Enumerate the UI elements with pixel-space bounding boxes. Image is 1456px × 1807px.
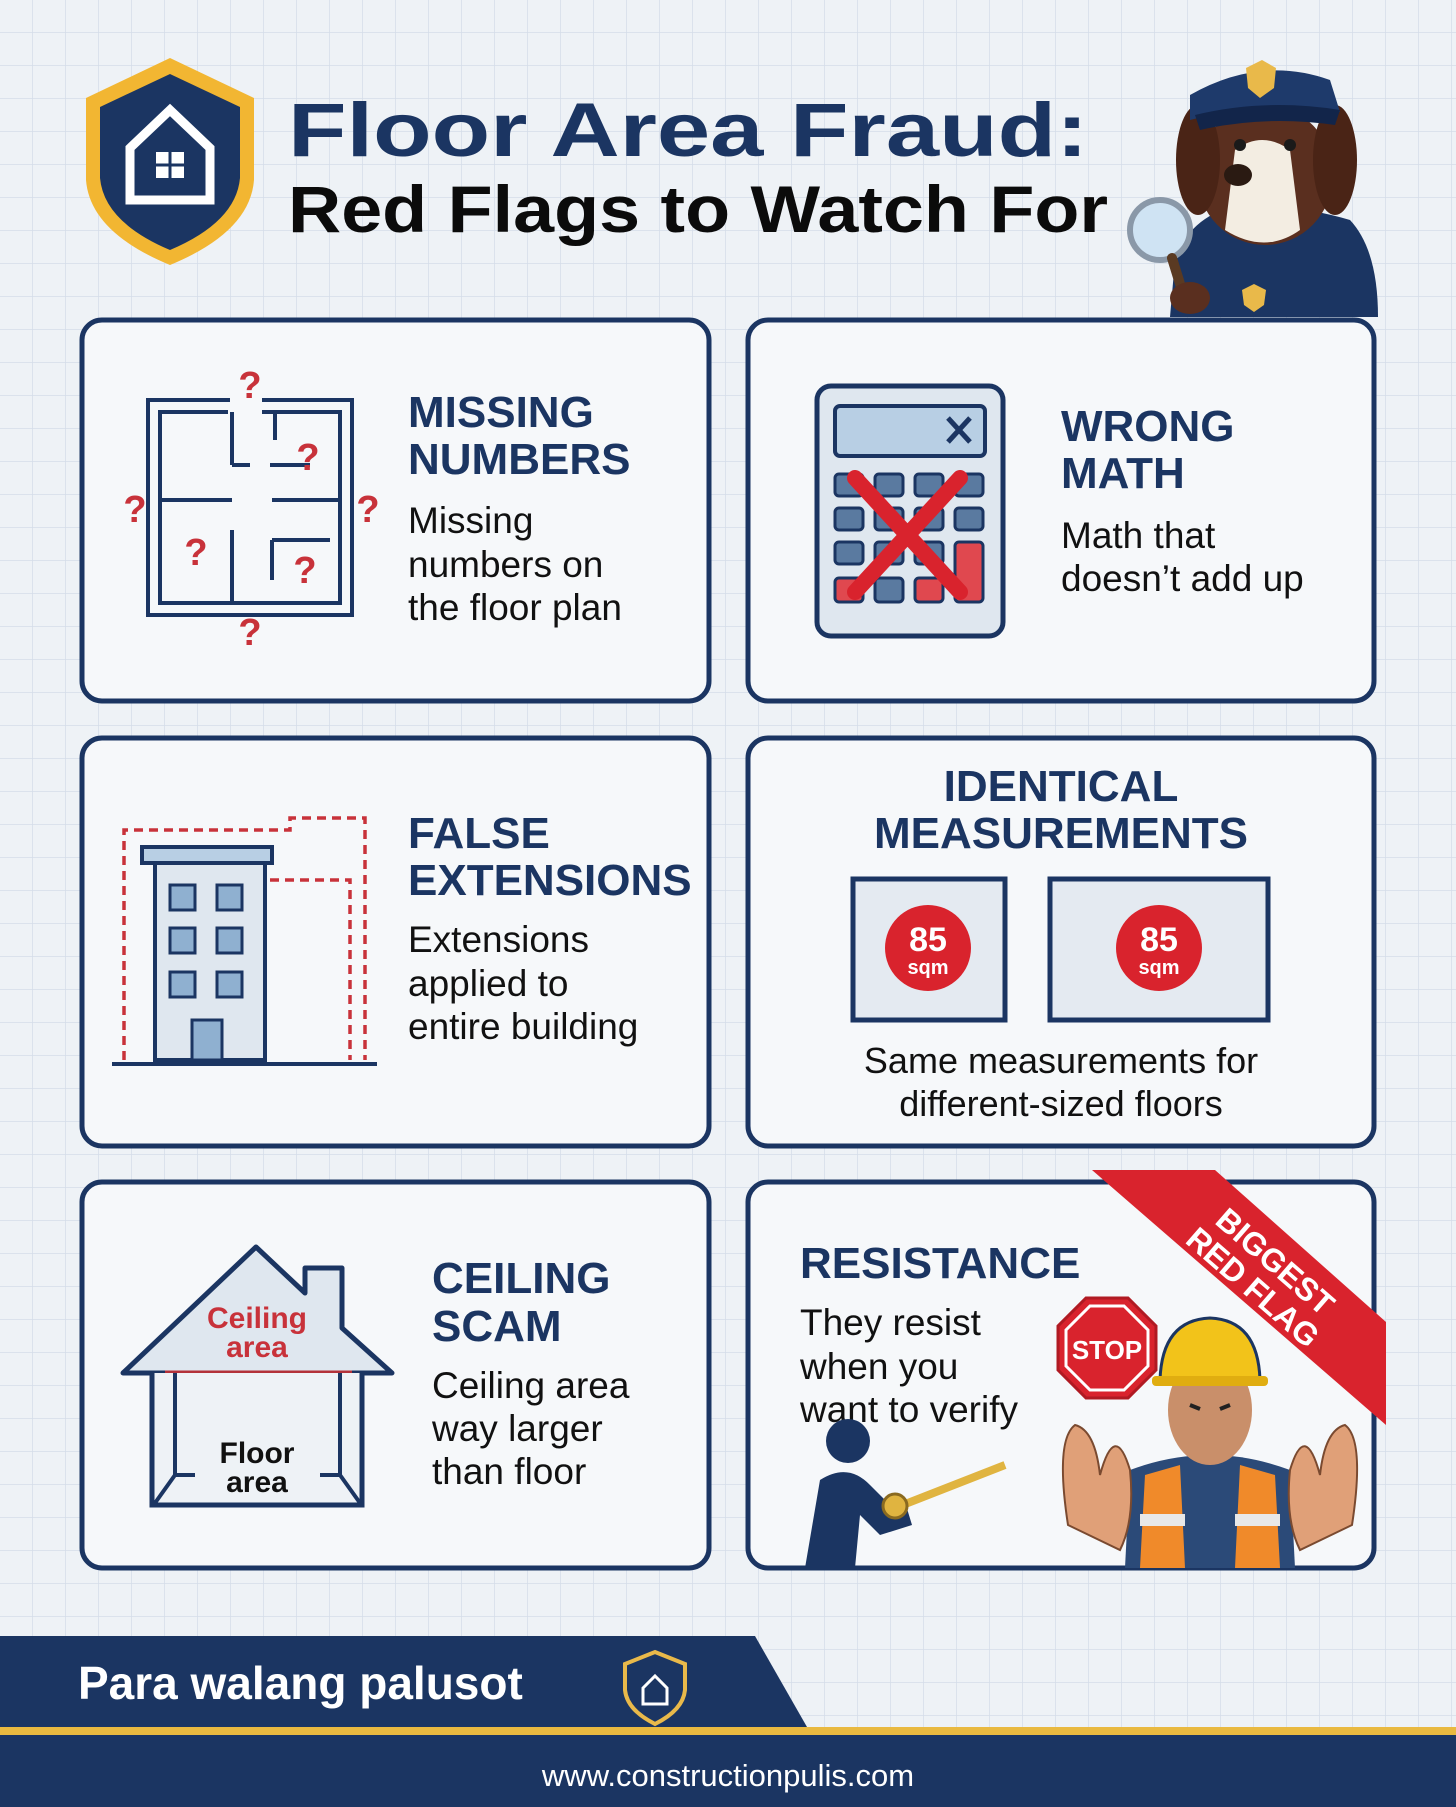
heading: RESISTANCE (800, 1239, 1080, 1288)
footer banner: tagline (0, 1636, 807, 1727)
icon: small shield (625, 1652, 685, 1724)
icon: two floor boxes with 85 sqm: sqm (907, 957, 949, 979)
text block: the floor plan (408, 587, 622, 628)
text block: applied to (408, 963, 568, 1004)
heading: MEASUREMENTS (874, 809, 1248, 858)
text block: doesn’t add up (1061, 558, 1304, 599)
text block: They resist (800, 1302, 981, 1343)
title: Floor Area Fraud: (288, 88, 1088, 173)
text block: way larger (431, 1408, 603, 1449)
footer: website url (0, 1735, 1456, 1807)
heading: EXTENSIONS (408, 856, 692, 905)
icon: floor plan with question marks: ? (238, 612, 262, 654)
text block: when you (799, 1346, 958, 1387)
text block: entire building (408, 1006, 638, 1047)
text block: different-sized floors (899, 1083, 1223, 1124)
text block: Same measurements for (864, 1040, 1258, 1081)
panel: wrong math (748, 320, 1374, 701)
heading: MISSING (408, 388, 594, 437)
footer banner: tagline: Para walang palusot (78, 1657, 523, 1709)
icon: building with dashed extensions (112, 818, 377, 1064)
icon: stop sign: STOP (1072, 1335, 1142, 1365)
icon: two floor boxes with 85 sqm (853, 879, 1268, 1020)
icon: stop sign (1058, 1298, 1156, 1398)
panel: ceiling scam (82, 1182, 709, 1568)
icon: floor plan with question marks: ? (296, 437, 320, 479)
title (288, 88, 1108, 246)
icon: floor plan with question marks: ? (293, 550, 317, 592)
icon: floor plan with question marks: ? (356, 489, 380, 531)
panel: identical measurements (748, 738, 1374, 1146)
panel: false extensions (82, 738, 709, 1146)
text block: numbers on (408, 544, 603, 585)
text block: Ceiling area (432, 1365, 629, 1406)
icon: house ceiling vs floor: Ceiling (207, 1302, 307, 1335)
icon: house ceiling vs floor: area (226, 1466, 288, 1499)
icon: house ceiling vs floor (123, 1247, 392, 1505)
heading: NUMBERS (408, 435, 630, 484)
logo shield (86, 58, 254, 265)
heading: SCAM (432, 1302, 562, 1351)
heading: MATH (1061, 449, 1185, 498)
footer: website url: www.constructionpulis.com (541, 1758, 914, 1793)
icon: floor plan with question marks: ? (238, 365, 262, 407)
ribbon: biggest red flag: BIGGEST (1209, 1201, 1341, 1323)
icon: person measuring (805, 1419, 1005, 1568)
icon: house ceiling vs floor: area (226, 1331, 288, 1364)
icon: floor plan with question marks: ? (184, 532, 208, 574)
text block: than floor (432, 1451, 586, 1492)
icon: calculator with red X (817, 386, 1003, 636)
ribbon: biggest red flag (1092, 1170, 1386, 1425)
icon: two floor boxes with 85 sqm: 85 (909, 921, 947, 959)
icon: two floor boxes with 85 sqm: 85 (1140, 921, 1178, 959)
icon: construction worker (1063, 1318, 1357, 1568)
panel: missing numbers (82, 320, 709, 701)
icon: two floor boxes with 85 sqm: sqm (1138, 957, 1180, 979)
text block: Missing (408, 500, 533, 541)
icon: floor plan with question marks (123, 365, 380, 654)
heading: CEILING (432, 1254, 610, 1303)
ribbon: biggest red flag: RED FLAG (1179, 1220, 1326, 1355)
icon: house ceiling vs floor: Floor (220, 1437, 295, 1470)
heading: WRONG (1061, 402, 1235, 451)
mascot: police dog with magnifier (1130, 60, 1378, 317)
footer: gold line (0, 1727, 1456, 1735)
panel: resistance (748, 1170, 1386, 1568)
icon: floor plan with question marks: ? (123, 489, 147, 531)
heading: IDENTICAL (944, 762, 1178, 811)
text block: Extensions (408, 919, 589, 960)
text block: want to verify (799, 1389, 1018, 1430)
text block: Math that (1061, 515, 1215, 556)
heading: FALSE (408, 809, 550, 858)
title: Red Flags to Watch For (288, 172, 1108, 246)
